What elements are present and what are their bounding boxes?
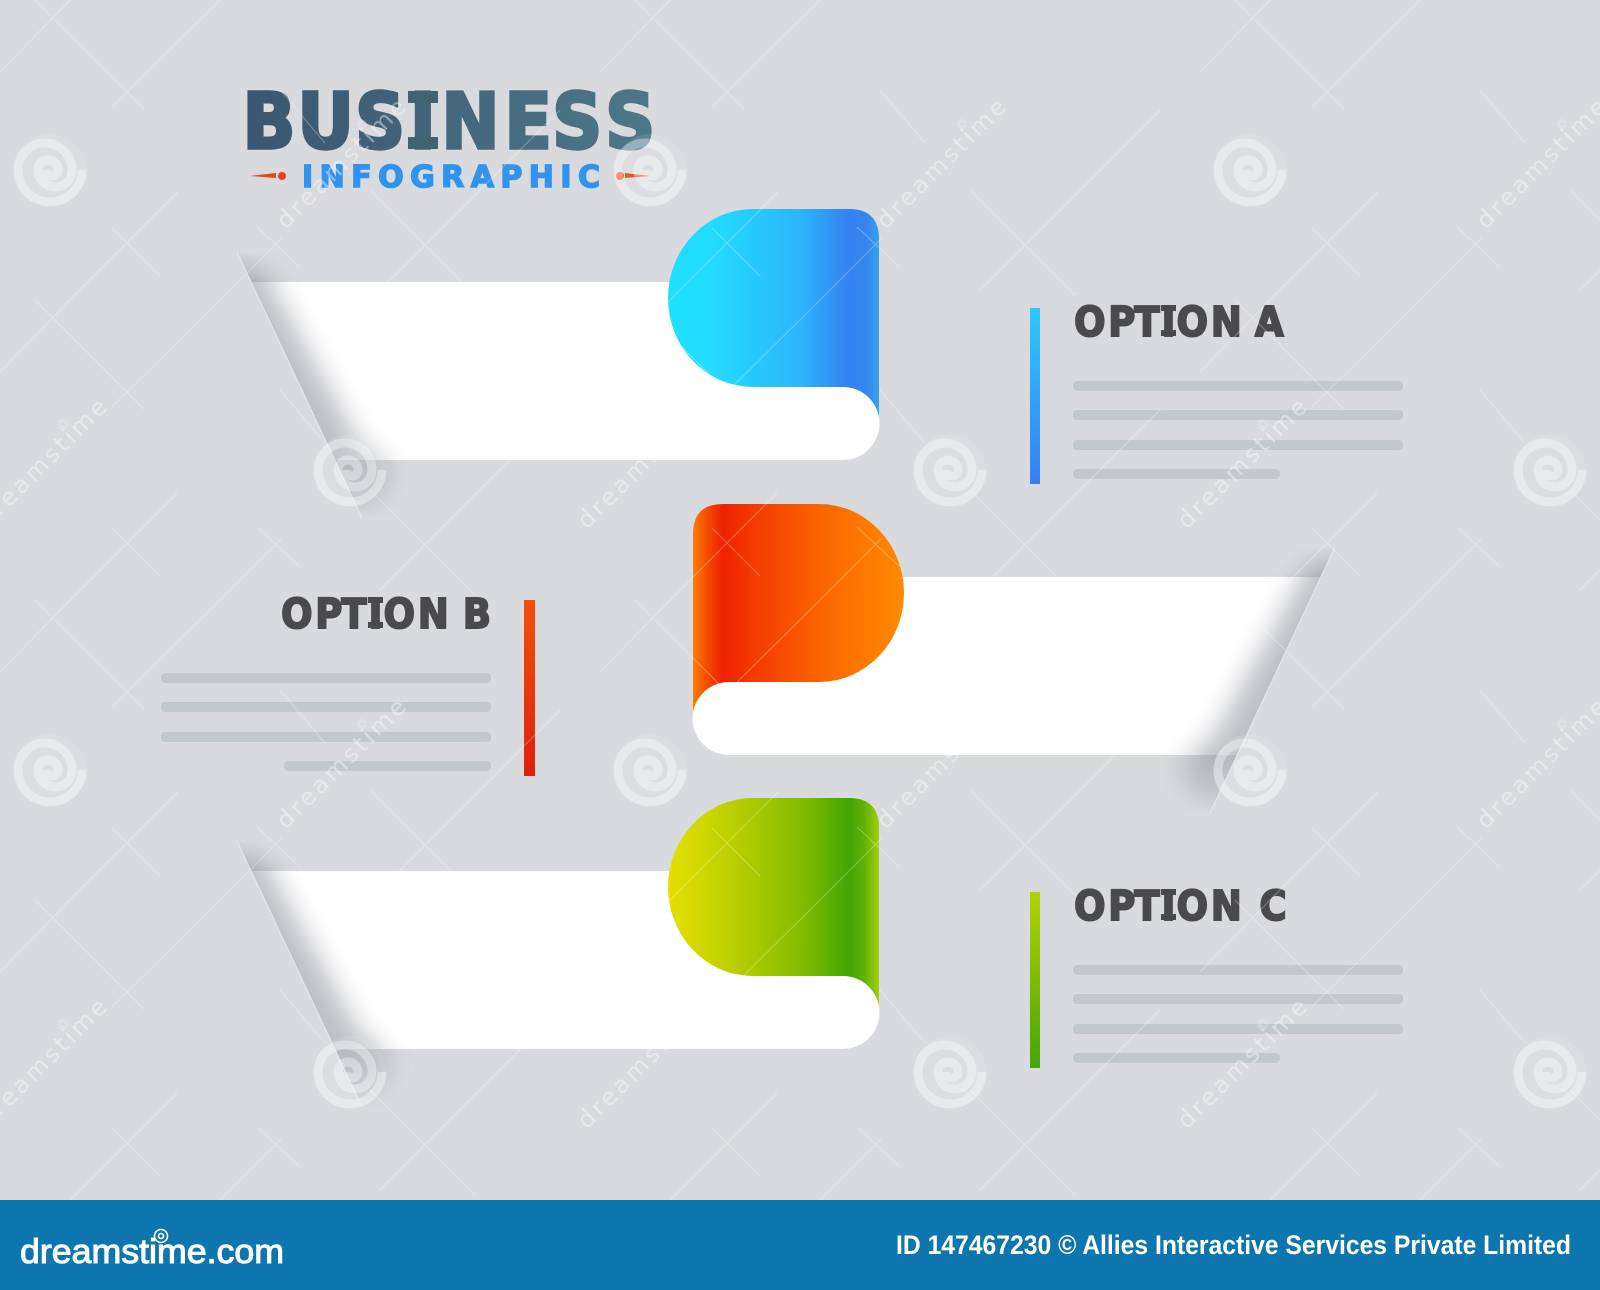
slit edge highlight A — [237, 252, 362, 518]
watermark text: © — [1555, 718, 1568, 733]
paper fold C — [750, 976, 880, 1049]
placeholder text lines A — [1073, 381, 1403, 479]
ornament: right dash — [616, 172, 650, 180]
watermark text: © — [955, 718, 968, 733]
accent bar A — [1030, 308, 1040, 484]
watermark text: dreamstime — [870, 693, 1012, 834]
watermark text: dreamstime — [571, 993, 713, 1134]
watermark text: © — [1256, 418, 1269, 433]
subheading: infographic: INFOGRAPHIC — [302, 160, 600, 195]
watermark text: © — [56, 1018, 69, 1033]
watermark text: dreamstime — [571, 393, 713, 534]
accent bar B — [524, 600, 535, 776]
paper fold B — [692, 682, 822, 755]
colour tab B — [693, 504, 904, 725]
white slit panel B — [821, 552, 1332, 804]
paper fold A — [750, 387, 880, 460]
watermark text: © — [656, 418, 669, 433]
watermark text: dreamstime — [270, 93, 412, 234]
watermark text: dreamstime — [270, 693, 412, 834]
heading: business: BUSINESS — [243, 78, 655, 167]
colour tab A — [668, 209, 879, 430]
title — [243, 78, 655, 195]
slit edge highlight B — [1210, 547, 1335, 813]
panel: option A banner — [200, 209, 880, 530]
watermark text: © — [56, 418, 69, 433]
placeholder text lines C — [1073, 965, 1403, 1063]
text block: option C — [1030, 883, 1403, 1068]
watermark text: © — [955, 118, 968, 133]
text block: option B — [161, 591, 535, 776]
watermark text: dreamstime — [870, 93, 1012, 234]
accent bar C — [1030, 892, 1040, 1068]
footer logo swirl icon — [154, 1230, 168, 1242]
ornament: left dash — [250, 172, 286, 180]
heading: option A: OPTION A — [1074, 299, 1284, 347]
watermark swirl icons — [14, 134, 1586, 1108]
slit edge highlight C — [237, 841, 362, 1107]
text block: option A — [1030, 299, 1403, 484]
heading: option C: OPTION C — [1074, 883, 1287, 931]
watermark text: © — [1555, 118, 1568, 133]
colour tab C — [668, 798, 879, 1019]
panel: option C banner — [200, 798, 880, 1119]
watermark text: dreamstime — [1171, 993, 1313, 1134]
panel: option B banner — [692, 504, 1372, 825]
watermark text: © — [656, 1018, 669, 1033]
footer logo text: dreamstime.com — [20, 1233, 284, 1271]
watermark text: © — [355, 118, 368, 133]
footer bar — [0, 1200, 1600, 1290]
white slit panel A — [240, 256, 751, 510]
white slit panel C — [240, 846, 751, 1098]
watermark text: © — [1256, 1018, 1269, 1033]
heading: option B: OPTION B — [281, 591, 491, 639]
watermark text: © — [355, 718, 368, 733]
placeholder text lines B — [161, 673, 491, 771]
watermark text: dreamstime — [1171, 393, 1313, 534]
